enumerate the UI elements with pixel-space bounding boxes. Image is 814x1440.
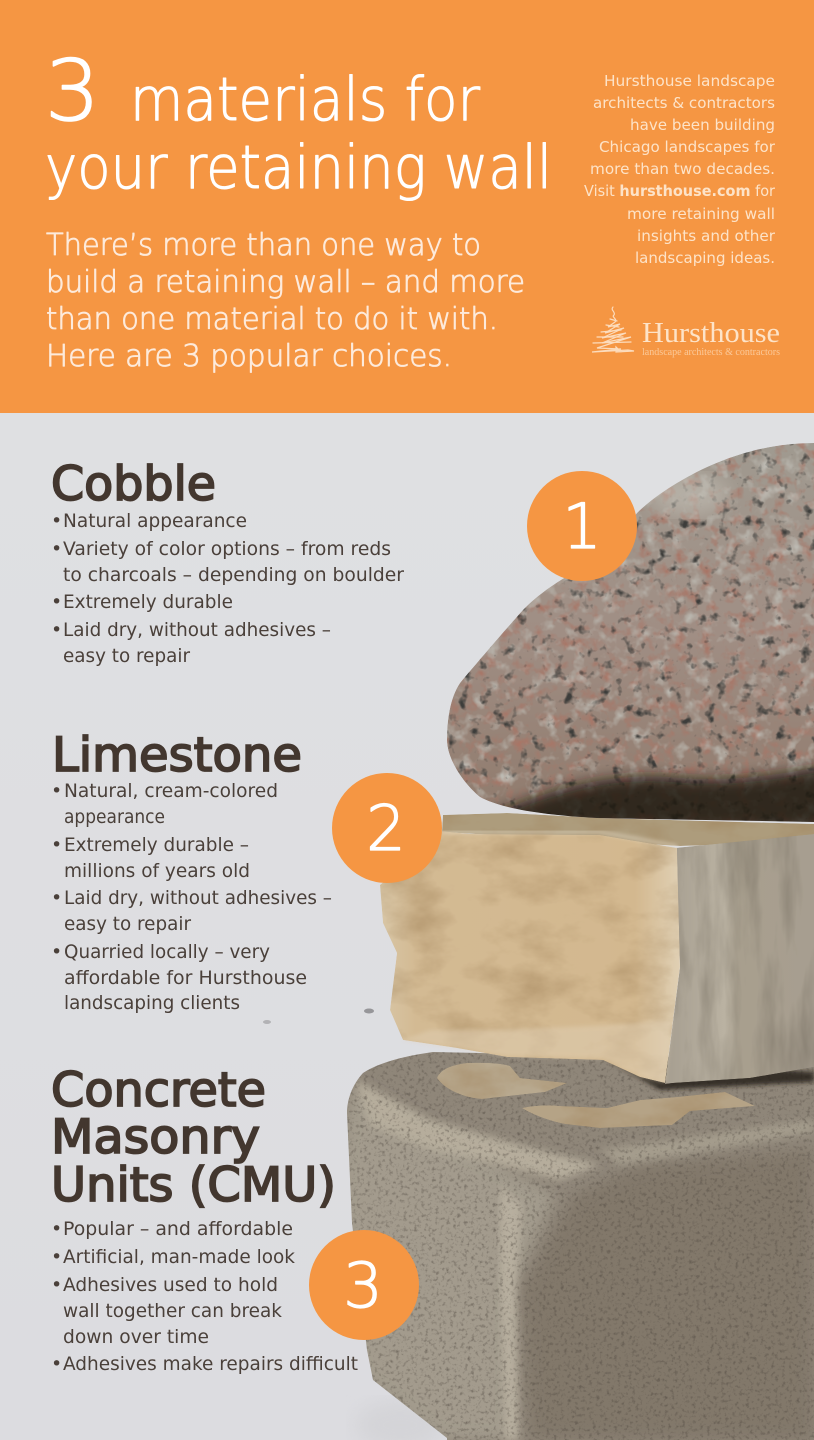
limestone pale top arris: [440, 832, 677, 846]
number badge 1: [527, 471, 637, 581]
number badge 3: 3: [343, 1249, 383, 1322]
concrete masonry stone: [340, 1045, 814, 1440]
limestone side face: [665, 834, 814, 1084]
number badge 3: [309, 1230, 419, 1340]
cobble list: Extremely durable: [63, 591, 233, 613]
concrete list: wall together can break: [63, 1300, 282, 1322]
limestone list: appearance: [64, 806, 165, 828]
cobble list: easy to repair: [63, 645, 190, 667]
concrete body with faces: [340, 1045, 814, 1440]
section: concrete masonry units: [51, 1063, 358, 1375]
limestone list: millions of years old: [64, 860, 250, 882]
concrete list: •: [51, 1218, 62, 1240]
company blurb: landscaping ideas.: [635, 249, 775, 267]
section: limestone: [51, 728, 332, 1014]
icon: scribbled tree: [592, 307, 634, 352]
limestone list: affordable for Hursthouse: [64, 967, 307, 989]
specks on backdrop: [263, 1020, 271, 1024]
company blurb: [584, 72, 776, 267]
limestone block: [380, 813, 814, 1090]
concrete list: •: [51, 1274, 62, 1296]
company blurb: Hursthouse landscape: [604, 72, 775, 90]
cobble list: [51, 510, 404, 667]
company blurb: architects & contractors: [593, 94, 775, 112]
section: cobble: [51, 457, 404, 667]
concrete list: Artificial, man-made look: [63, 1246, 295, 1268]
company blurb: more than two decades.: [590, 160, 775, 178]
photo background: [0, 413, 814, 1440]
cobble list: Laid dry, without adhesives –: [63, 619, 331, 641]
number badge 2: 2: [366, 792, 406, 865]
cobble list: Natural appearance: [63, 510, 247, 532]
intro text: [46, 228, 525, 374]
company blurb: insights and other: [637, 227, 776, 245]
heading: concrete masonry units: Concrete: [51, 1063, 266, 1118]
cobble list: •: [51, 591, 62, 613]
limestone list: Quarried locally – very: [64, 941, 270, 963]
orange header panel: [0, 0, 814, 413]
mortar flake left: [437, 1063, 567, 1099]
mortar flake right: [522, 1092, 755, 1128]
limestone top face: [442, 813, 814, 846]
concrete list: Adhesives make repairs difficult: [63, 1353, 358, 1375]
heading: cobble: Cobble: [51, 457, 216, 512]
company blurb: Visit hursthouse.com for: [584, 182, 776, 200]
intro text: There’s more than one way to: [46, 228, 481, 263]
concrete list: down over time: [63, 1326, 209, 1348]
concrete list: Adhesives used to hold: [63, 1274, 278, 1296]
heading: limestone: Limestone: [52, 728, 302, 783]
limestone list: Natural, cream-colored: [64, 780, 278, 802]
heading: concrete masonry units: Units (CMU): [51, 1158, 336, 1213]
tagline: landscape architects & contractors: [642, 347, 780, 358]
concrete list: Popular – and affordable: [63, 1218, 293, 1240]
limestone list: •: [51, 780, 62, 802]
boulder shading: [490, 475, 814, 830]
limestone list: •: [51, 834, 62, 856]
intro text: Here are 3 popular choices.: [46, 339, 452, 374]
concrete list: [51, 1218, 358, 1375]
limestone shadow: [600, 1056, 814, 1090]
title: 3: [45, 42, 100, 140]
heading: concrete masonry units: Masonry: [51, 1110, 260, 1165]
concrete list: •: [51, 1246, 62, 1268]
heading: concrete masonry units: [51, 1063, 336, 1213]
cobble list: Variety of color options – from reds: [63, 538, 391, 560]
limestone list: easy to repair: [64, 913, 191, 935]
limestone list: •: [51, 941, 62, 963]
number badge 2: [332, 773, 442, 883]
limestone front face: [380, 831, 680, 1083]
company blurb: more retaining wall: [627, 205, 775, 223]
limestone list: •: [51, 887, 62, 909]
title: [45, 42, 552, 203]
concrete list: •: [51, 1353, 62, 1375]
cobble boulder: [447, 443, 814, 830]
cobble list: to charcoals – depending on boulder: [63, 564, 404, 586]
limestone list: Laid dry, without adhesives –: [64, 887, 332, 909]
logo: Hursthouse: [592, 307, 780, 358]
limestone lit chipped bottom edge: [403, 1020, 672, 1083]
cobble list: •: [51, 510, 62, 532]
limestone list: [51, 780, 332, 1014]
company blurb: have been building: [630, 116, 775, 134]
limestone list: landscaping clients: [64, 992, 240, 1014]
number badge 1: 1: [562, 490, 602, 563]
cobble list: •: [51, 619, 62, 641]
cobble list: •: [51, 538, 62, 560]
intro text: build a retaining wall – and more: [46, 265, 525, 300]
company name: Hursthouse: [642, 318, 780, 349]
title: materials for: [130, 65, 480, 135]
limestone list: Extremely durable –: [64, 834, 249, 856]
intro text: than one material to do it with.: [46, 302, 498, 337]
company blurb: Chicago landscapes for: [599, 138, 776, 156]
title: your retaining wall: [45, 133, 552, 203]
